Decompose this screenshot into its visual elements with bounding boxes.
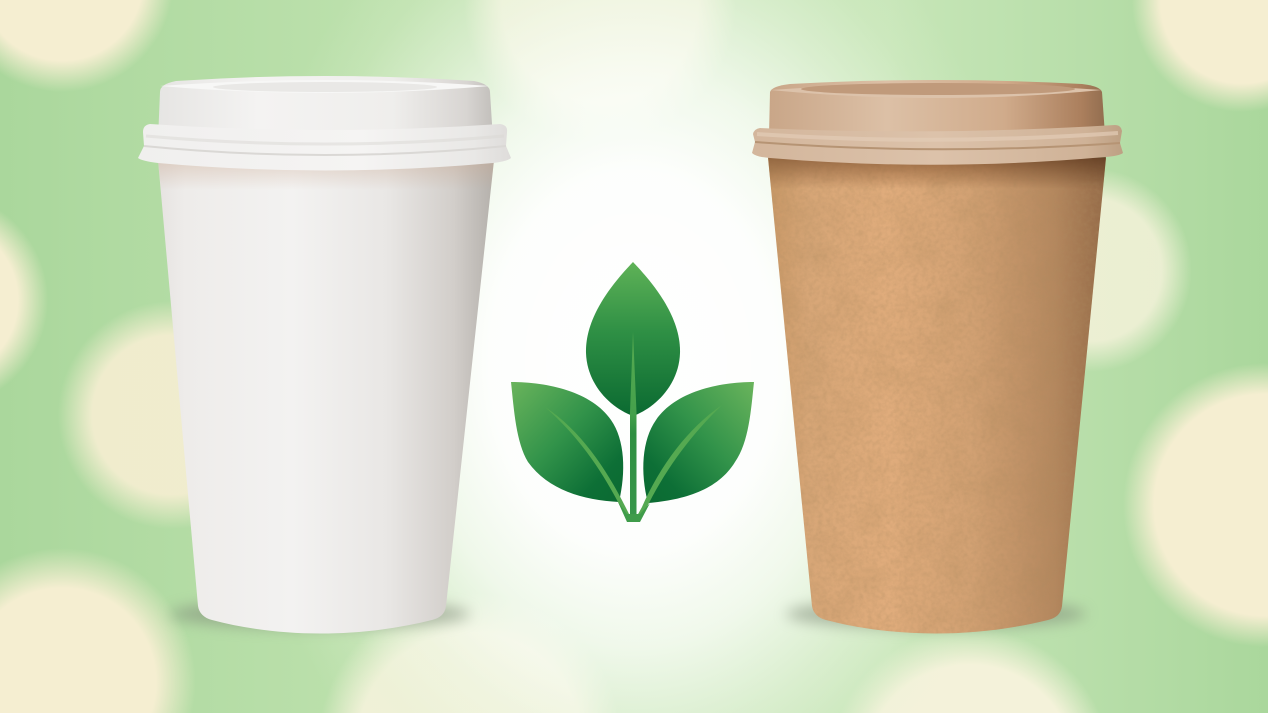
- kraft lid top: [769, 80, 1105, 135]
- central stem: [630, 332, 636, 516]
- kraft lid rim: [752, 125, 1123, 165]
- icon: plant sprout: [511, 262, 754, 522]
- white lid top: [158, 76, 493, 140]
- white cup body: [158, 160, 494, 634]
- white lid rim: [138, 124, 511, 170]
- stem base: [618, 502, 650, 522]
- kraft cup body: [768, 158, 1106, 634]
- kraft cup shadow: [786, 599, 1086, 629]
- left leaf: [511, 382, 623, 502]
- kraft cup: [752, 80, 1123, 634]
- left vein: [545, 407, 630, 516]
- right vein: [637, 405, 722, 516]
- right leaf: [643, 382, 754, 503]
- white cup: [138, 76, 511, 634]
- top leaf: [586, 262, 680, 416]
- white cup shadow: [170, 599, 470, 629]
- illustration: two coffee cups with plant icon: [138, 76, 1123, 636]
